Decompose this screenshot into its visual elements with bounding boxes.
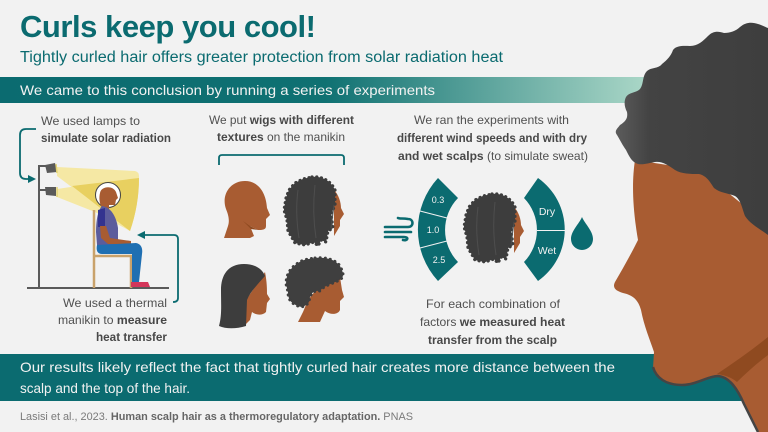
centre head: wavy wig xyxy=(464,194,524,263)
text: thermal manikin: We used a thermal xyxy=(63,296,167,310)
ground xyxy=(27,287,169,289)
text: wind and sweat: We ran the experiments with xyxy=(414,113,569,127)
text: measured heat transfer: factors we measured heat xyxy=(420,315,565,329)
text: wigs xyxy=(209,113,354,144)
solar radiation experiment illustration xyxy=(27,163,169,288)
text: measured heat transfer: For each combination of xyxy=(426,297,561,311)
text: wind and sweat: different wind speeds and with dry xyxy=(397,131,587,145)
citation: Lasisi et al., 2023. Human scalp hair as a thermoregulatory adaptation. PNAS xyxy=(20,411,413,423)
chair xyxy=(94,210,131,288)
text: wind and sweat xyxy=(397,113,588,163)
subtitle: Tightly curled hair offers greater protection from solar radiation heat xyxy=(20,49,504,66)
head: bald xyxy=(224,181,270,238)
top banner: We came to this conclusion by running a series of experiments xyxy=(20,82,435,98)
left dial: wind speeds: 1.0 xyxy=(427,225,439,235)
manikin xyxy=(96,182,150,287)
right dial: dry and wet: Wet xyxy=(538,245,556,257)
left dial: wind speeds: 2.5 xyxy=(433,255,445,265)
text: wigs: textures on the manikin xyxy=(217,130,345,144)
icon: wind xyxy=(385,218,412,240)
bottom banner: Our results likely reflect the fact that tightly curled hair creates more distance between the xyxy=(20,359,615,375)
text: lamps xyxy=(41,114,171,145)
light beams xyxy=(57,167,139,231)
icon: water drop xyxy=(571,217,593,250)
text: wind and sweat: and wet scalps (to simulate sweat) xyxy=(398,149,588,163)
text: thermal manikin xyxy=(58,296,167,344)
head: wavy wig xyxy=(284,177,344,246)
head: straight wig xyxy=(219,264,270,328)
arrow: lamps xyxy=(20,129,36,183)
top banner xyxy=(0,77,650,103)
text: measured heat transfer xyxy=(420,297,565,347)
text: thermal manikin: heat transfer xyxy=(96,330,167,344)
right dial: dry and wet xyxy=(524,178,565,281)
left dial: wind speeds: 0.3 xyxy=(432,195,444,205)
text: lamps: simulate solar radiation xyxy=(41,131,171,145)
bottom banner: scalp and the top of the hair. xyxy=(20,380,190,396)
bottom banner xyxy=(0,354,760,401)
arrow: manikin xyxy=(137,231,178,302)
text: thermal manikin: manikin to measure xyxy=(58,313,167,327)
background below neck xyxy=(743,401,768,432)
bracket xyxy=(219,155,344,165)
lamp stand xyxy=(39,166,47,288)
text: lamps: We used lamps to xyxy=(41,114,140,128)
right dial: dry and wet: Dry xyxy=(539,206,556,218)
head: short curly wig xyxy=(286,258,344,322)
title: Curls keep you cool! xyxy=(20,9,316,44)
text: measured heat transfer: transfer from the scalp xyxy=(428,333,557,347)
large head illustration xyxy=(614,23,768,432)
left dial: wind speeds xyxy=(418,178,458,281)
lamps xyxy=(45,163,57,197)
text: wigs: We put wigs with different xyxy=(209,113,354,127)
